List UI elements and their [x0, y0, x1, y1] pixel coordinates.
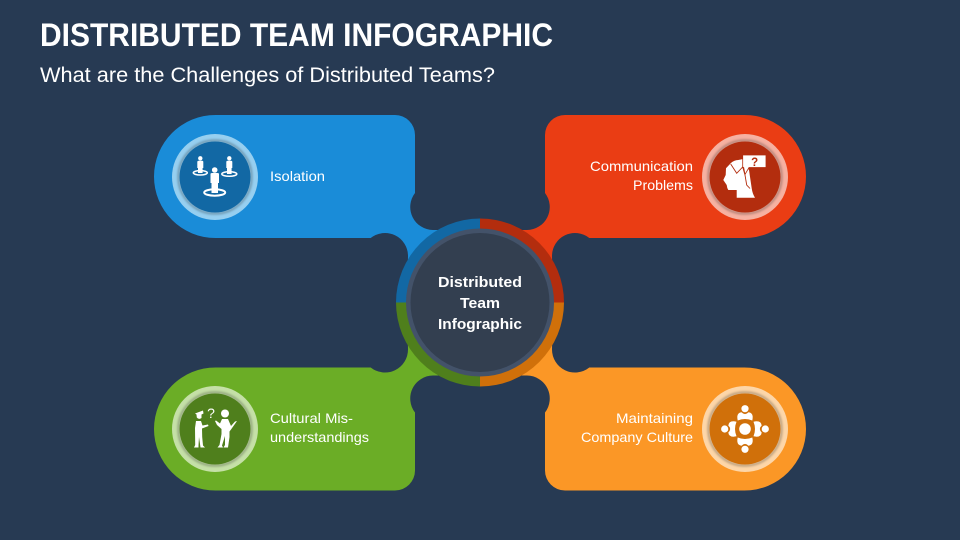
label: Maintaining Company Culture [581, 410, 693, 445]
hub label [438, 274, 522, 333]
hub ring: four coloured quadrants [396, 218, 564, 387]
label: Cultural Mis-understandings: understandings [270, 429, 369, 445]
label: Cultural Mis-understandings [270, 410, 369, 445]
hub disc [406, 228, 554, 376]
icon: two people with question mark: ? [207, 405, 215, 421]
icon: two people with question mark [172, 386, 258, 472]
label: Cultural Mis-understandings: Cultural Mis- [270, 410, 353, 426]
subtitle: What are the Challenges of Distributed Teams? [40, 64, 495, 87]
icon: people around a table [702, 386, 788, 472]
panel shape: red [480, 115, 806, 302]
icon: head with question bubble [702, 134, 788, 220]
label: Communication Problems [590, 158, 693, 193]
panel shape: green [154, 302, 480, 490]
hub label: Infographic [438, 316, 522, 333]
label: Maintaining Company Culture: Maintaining [616, 410, 693, 426]
panel: cultural misunderstandings [154, 302, 480, 490]
label: Maintaining Company Culture: Company Culture [581, 429, 693, 445]
title: DISTRIBUTED TEAM INFOGRAPHIC [40, 17, 553, 53]
panel shape: blue [154, 115, 480, 302]
label: Communication Problems: Communication [590, 158, 693, 174]
icon: head with question bubble: ? [751, 157, 758, 169]
hub label: Team [460, 295, 500, 312]
panel shape: orange [480, 302, 806, 490]
label: Isolation: Isolation [270, 168, 325, 184]
label: Communication Problems: Problems [633, 177, 693, 193]
center hub [396, 218, 564, 387]
panel: maintaining company culture [480, 302, 806, 490]
panel: isolation [154, 115, 480, 302]
panel: communication problems [480, 115, 806, 302]
icon: three people on rings [172, 134, 258, 220]
hub label: Distributed [438, 274, 522, 291]
